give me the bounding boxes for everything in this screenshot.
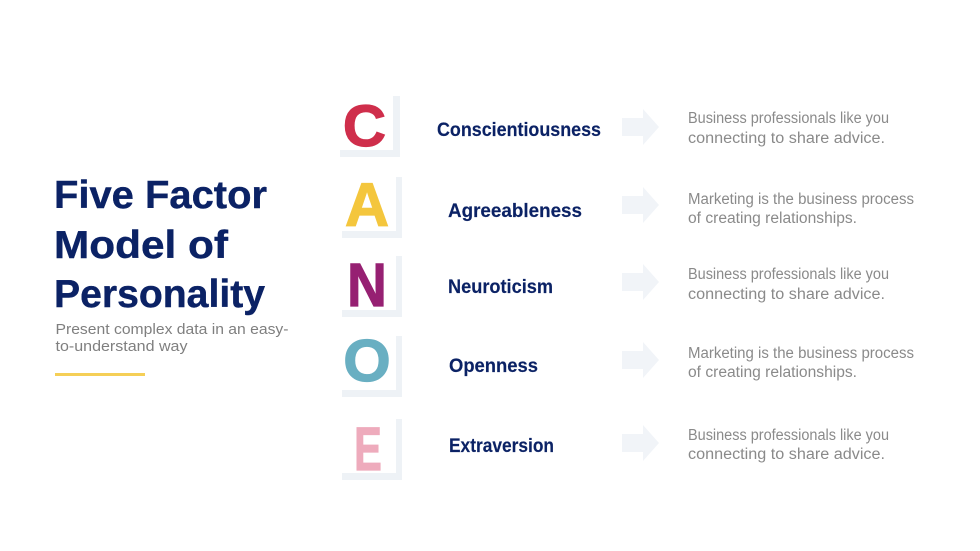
description A: Marketing is the business process [688,191,914,208]
arrow N [622,264,659,300]
description C: Business professionals like you [688,110,889,127]
description A: of creating relationships. [688,210,857,227]
letter tile A: A [345,171,389,239]
letter tile E [342,416,402,484]
row: extraversion [342,416,889,484]
subtitle [56,321,288,355]
letter tile N: N [347,251,387,320]
arrow O [622,342,659,378]
description E: connecting to share advice. [688,446,885,463]
accent line [55,373,145,376]
title: Model of [54,224,228,267]
description E [688,427,889,463]
letter tile N [342,251,402,320]
subtitle: to-understand way [56,338,188,355]
description C: connecting to share advice. [688,130,885,147]
description N [688,266,889,303]
heading E: Extraversion [449,435,554,457]
description O [688,345,914,381]
title: Personality [54,273,266,316]
row: agreeableness [342,171,914,239]
letter tile C: C [343,93,386,159]
heading N: Neuroticism [448,276,553,298]
arrow C [622,109,659,145]
description N: Business professionals like you [688,266,889,283]
row: openness [342,328,914,397]
heading A: Agreeableness [448,200,582,222]
description O: of creating relationships. [688,364,857,381]
description E: Business professionals like you [688,427,889,444]
letter tile O: O [343,328,391,394]
subtitle: Present complex data in an easy- [56,321,288,338]
title: Five Factor [54,174,267,217]
row: conscientiousness [340,93,889,159]
row: neuroticism [342,251,889,320]
description C [688,110,889,147]
title [54,174,267,316]
letter tile E: E [354,416,382,484]
arrow E [622,425,659,461]
heading O: Openness [449,355,538,377]
description O: Marketing is the business process [688,345,914,362]
description A [688,191,914,227]
description N: connecting to share advice. [688,286,885,303]
heading C: Conscientiousness [437,119,601,141]
arrow A [622,187,659,223]
